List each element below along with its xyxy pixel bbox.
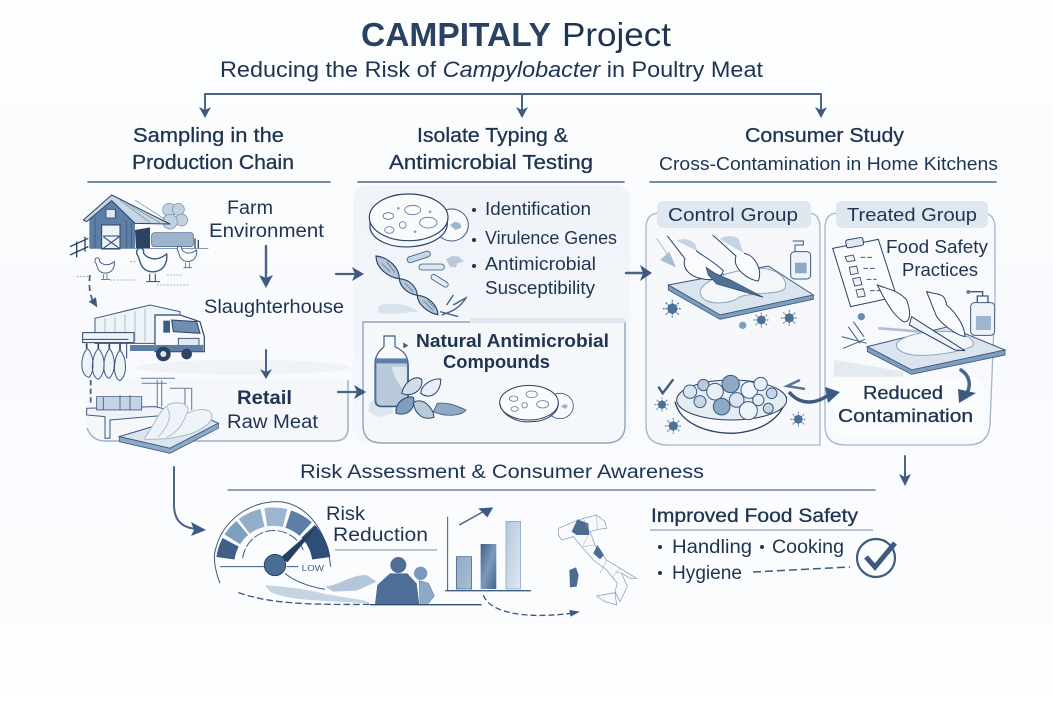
title: [361, 16, 671, 53]
arrow: farm to slaughterhouse: [259, 246, 273, 288]
dashed path: farm to slaughterhouse: [89, 275, 97, 403]
arrow: sampling to typing: [336, 267, 364, 281]
column heading: consumer study: [650, 125, 998, 182]
icon: consumer silhouettes: [370, 557, 482, 605]
column heading: consumer study: Consumer Study: [745, 125, 904, 147]
gauge: risk reduction: [214, 502, 377, 604]
icon: bottle and leaves: [368, 336, 466, 418]
arrow: control to treated curve: [787, 380, 840, 403]
arrow: retail to compounds: [338, 385, 366, 399]
label: reduced contamination: Reduced: [863, 383, 943, 403]
block: improved food safety: Hygiene: [672, 563, 742, 584]
panel: treated group: Treated Group: [847, 205, 977, 225]
icon: retail counter and raw meat: [87, 378, 218, 453]
arrow: slaughterhouse to retail: [260, 350, 272, 379]
heading: risk assessment: Risk Assessment & Consumer Awareness: [300, 462, 704, 483]
icon: DNA helix and bacteria: [376, 250, 467, 317]
column heading: sampling: Production Chain: [132, 152, 294, 174]
title: CAMPITALY: [361, 16, 551, 53]
top connector arrows: [199, 94, 827, 118]
label: farm environment: Environment: [209, 221, 325, 242]
label: retail raw meat: Retail: [237, 388, 292, 409]
label: risk reduction: Risk: [326, 504, 366, 525]
panel: control group: [646, 201, 820, 445]
label: slaughterhouse: Slaughterhouse: [204, 297, 344, 318]
label: risk reduction: [326, 504, 437, 550]
panel: treated group: Practices: [902, 260, 978, 280]
list: typing outcomes: Virulence Genes: [485, 228, 617, 248]
sub-panel: natural antimicrobial compounds: Compounds: [443, 352, 550, 372]
label: reduced contamination: [833, 378, 983, 436]
list: typing outcomes: [472, 199, 617, 298]
arrow: typing to consumer study: [626, 265, 652, 281]
block: improved food safety: Cooking: [772, 537, 844, 558]
column heading: isolate typing: Antimicrobial Testing: [389, 152, 593, 174]
gauge: risk reduction: LOW: [302, 564, 325, 573]
list: typing outcomes: Identification: [485, 199, 591, 219]
block: improved food safety: Improved Food Safety: [651, 506, 859, 527]
label: retail raw meat: Raw Meat: [227, 412, 319, 433]
column heading: isolate typing: Isolate Typing &: [417, 125, 569, 147]
arrow: left column to risk gauge: [174, 467, 206, 536]
icon: farm barn with hens: [70, 195, 208, 285]
panel: treated group: [825, 201, 1005, 445]
icon: hands cutting chicken on board: [657, 235, 813, 329]
map: Italy: [558, 515, 637, 605]
icon: petri dish: [369, 194, 468, 247]
column heading: consumer study: Cross-Contamination in Home Kitchens: [659, 154, 998, 174]
panel: treated group: Food Safety: [886, 237, 988, 257]
arrow: consumer study to risk assessment: [899, 456, 911, 486]
panel: isolate typing: [353, 185, 630, 443]
list: typing outcomes: Antimicrobial: [485, 254, 596, 274]
icon: small petri dish: [500, 385, 573, 422]
icon: checklist clipboard: [833, 237, 897, 307]
list: typing outcomes: Susceptibility: [485, 278, 595, 298]
arrow: board to reduced contamination: [958, 370, 976, 403]
sub-panel: natural antimicrobial compounds: Natural Antimicrobial: [416, 331, 609, 351]
block: improved food safety: [650, 506, 873, 584]
column heading: sampling: Sampling in the: [133, 125, 284, 147]
icon: salad bowl with splats: [655, 375, 806, 434]
sub-panel: natural antimicrobial compounds: [363, 318, 625, 443]
label: retail raw meat: [227, 388, 319, 433]
title: Project: [562, 16, 671, 53]
label: farm environment: [209, 198, 325, 242]
panel: control group: Control Group: [668, 205, 798, 225]
label: reduced contamination: Contamination: [838, 406, 973, 426]
icon: safe handling on cutting board: [834, 285, 1005, 377]
icon: truck and hanging carcasses: [82, 305, 350, 381]
column heading: sampling: [88, 125, 330, 182]
icon: check mark badge: [857, 539, 895, 577]
subtitle: Reducing the Risk of Campylobacter in Poultry Meat: [220, 57, 763, 82]
bar chart: rising trend: [445, 507, 580, 617]
block: improved food safety: Handling: [672, 537, 752, 558]
column heading: isolate typing: [358, 125, 624, 182]
label: risk reduction: Reduction: [333, 525, 428, 546]
panel: sampling chain: [70, 195, 350, 453]
label: farm environment: Farm: [227, 198, 273, 219]
